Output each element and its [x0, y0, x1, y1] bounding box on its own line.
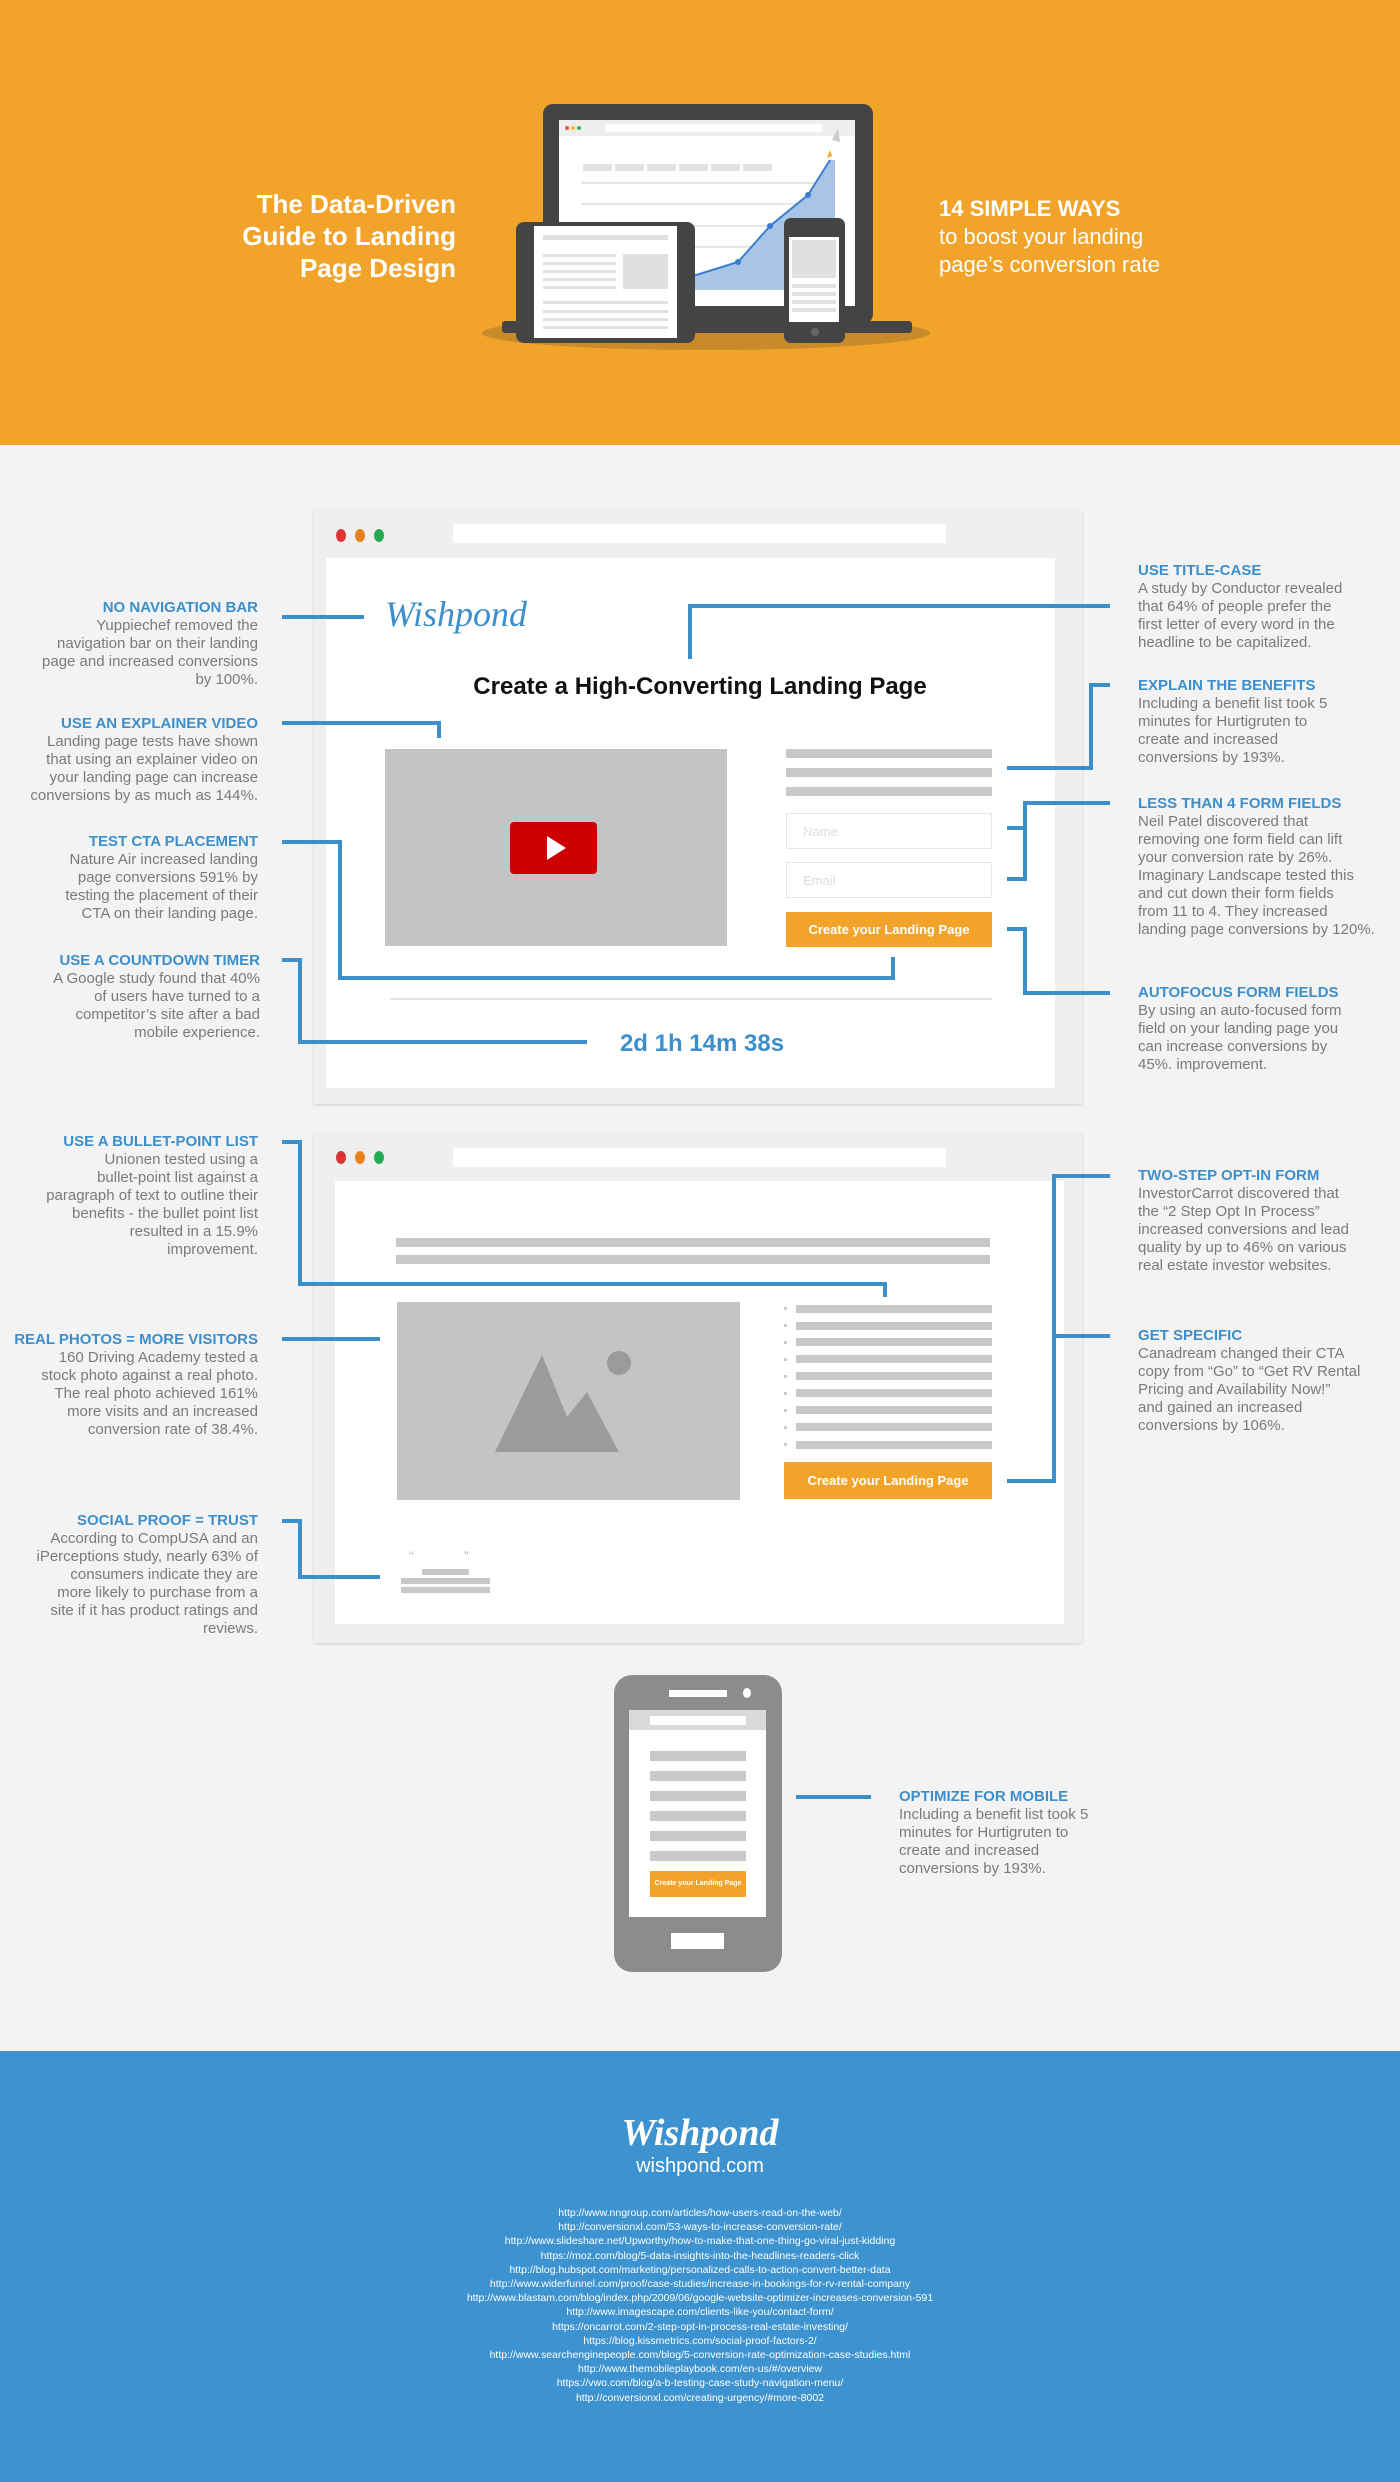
annotation: title-case: that 64% of people prefer the [1138, 598, 1331, 615]
annotation: get specific: and gained an increased [1138, 1399, 1302, 1416]
annotation: form fields [1138, 795, 1375, 938]
annotation: form fields: and cut down their form fields [1138, 885, 1334, 902]
header band [0, 0, 1400, 445]
sources list: https://oncarrot.com/2-step-opt-in-process-real-estate-investing/ [552, 2321, 848, 2333]
countdown timer: 2d 1h 14m 38s [620, 1030, 784, 1057]
annotation: explain benefits: Including a benefit list took 5 [1138, 695, 1327, 712]
annotation: two-step opt-in: TWO-STEP OPT-IN FORM [1138, 1167, 1319, 1184]
annotation: optimize for mobile: minutes for Hurtigruten to [899, 1824, 1068, 1841]
annotation: social proof: consumers indicate they are [70, 1566, 258, 1583]
annotation: no navigation bar: page and increased conversions [42, 653, 258, 670]
testimonial placeholder: “ [409, 1548, 414, 1564]
annotation: title-case: headline to be capitalized. [1138, 634, 1311, 651]
sources list: http://www.widerfunnel.com/proof/case-studies/increase-in-bookings-for-rv-rental-company [490, 2278, 910, 2290]
annotation: two-step opt-in: increased conversions and lead [1138, 1221, 1349, 1238]
annotation: explainer video [30, 715, 258, 804]
testimonial placeholder [401, 1548, 490, 1593]
annotation: explainer video: Landing page tests have shown [47, 733, 258, 750]
icon: mobile phone mockup [614, 1675, 782, 1972]
annotation: get specific: GET SPECIFIC [1138, 1327, 1242, 1344]
annotation: countdown timer: A Google study found that 40% [53, 970, 260, 987]
annotation: no navigation bar: Yuppiechef removed the [96, 617, 258, 634]
annotation: bullet-point list: improvement. [167, 1241, 258, 1258]
sources list: http://blog.hubspot.com/marketing/personalized-calls-to-action-convert-better-data [509, 2264, 891, 2276]
annotation: two-step opt-in: real estate investor websites. [1138, 1257, 1331, 1274]
form: Name [803, 824, 838, 839]
annotation: real photos: The real photo achieved 161% [55, 1385, 258, 1402]
annotation: social proof: SOCIAL PROOF = TRUST [77, 1512, 258, 1529]
bullet list [784, 1305, 992, 1449]
annotation: autofocus: can increase conversions by [1138, 1038, 1327, 1055]
annotation: two-step opt-in: InvestorCarrot discovered that [1138, 1185, 1339, 1202]
sources list: http://www.slideshare.net/Upworthy/how-to-make-that-one-thing-go-viral-just-kidding [505, 2235, 895, 2247]
sources list: http://conversionxl.com/53-ways-to-increase-conversion-rate/ [558, 2221, 842, 2233]
annotation: autofocus: By using an auto-focused form [1138, 1002, 1341, 1019]
annotation: real photos [14, 1331, 258, 1438]
footer [0, 2051, 1400, 2482]
annotation: countdown timer: mobile experience. [134, 1024, 260, 1041]
annotation: explain benefits: minutes for Hurtigruten to [1138, 713, 1307, 730]
annotation: no navigation bar: navigation bar on their landing [57, 635, 258, 652]
annotation: bullet-point list: resulted in a 15.9% [130, 1223, 258, 1240]
annotation: explain benefits: EXPLAIN THE BENEFITS [1138, 677, 1316, 694]
form [786, 749, 992, 947]
annotation: form fields: from 11 to 4. They increased [1138, 903, 1328, 920]
annotation: countdown timer [53, 952, 260, 1041]
annotation: bullet-point list: Unionen tested using a [105, 1151, 258, 1168]
annotation: test CTA placement: testing the placement of their [65, 887, 258, 904]
annotation: get specific: conversions by 106%. [1138, 1417, 1285, 1434]
annotation: real photos: conversion rate of 38.4%. [88, 1421, 258, 1438]
CTA button: Create your Landing Page [807, 1473, 969, 1488]
annotation: autofocus: AUTOFOCUS FORM FIELDS [1138, 984, 1339, 1001]
annotation: optimize for mobile: create and increased [899, 1842, 1039, 1859]
annotation: bullet-point list: paragraph of text to outline their [46, 1187, 258, 1204]
subtitle: page’s conversion rate [939, 252, 1160, 277]
sources list: http://www.blastam.com/blog/index.php/2009/06/google-website-optimizer-increases-conversion-591 [467, 2292, 933, 2304]
annotation: bullet-point list: USE A BULLET-POINT LIST [63, 1133, 258, 1150]
icon: play button [510, 822, 597, 874]
annotation: test CTA placement: CTA on their landing page. [81, 905, 258, 922]
title: The Data-Driven [257, 189, 456, 219]
annotation: title-case: A study by Conductor revealed [1138, 580, 1342, 597]
sources list: http://www.themobileplaybook.com/en-us/#/overview [578, 2363, 822, 2375]
footer logo: Wishpond [622, 2112, 778, 2154]
annotation: two-step opt-in [1138, 1167, 1349, 1274]
annotation: countdown timer: competitor’s site after a bad [75, 1006, 260, 1023]
annotation: social proof [36, 1512, 258, 1637]
sources list [467, 2207, 933, 2404]
subtitle: to boost your landing [939, 224, 1143, 249]
sources list: http://www.imagescape.com/clients-like-you/contact-form/ [566, 2306, 834, 2318]
annotation: social proof: reviews. [203, 1620, 258, 1637]
subtitle: 14 SIMPLE WAYS [939, 196, 1120, 221]
annotation: form fields: removing one form field can lift [1138, 831, 1342, 848]
illustration: devices [482, 104, 930, 350]
annotation: autofocus: 45%. improvement. [1138, 1056, 1267, 1073]
annotation: title-case: USE TITLE-CASE [1138, 562, 1261, 579]
title: Page Design [300, 253, 456, 283]
annotation: title-case: first letter of every word in the [1138, 616, 1335, 633]
annotation: two-step opt-in: the “2 Step Opt In Process” [1138, 1203, 1320, 1220]
panel: browser mockup 2 [314, 1133, 1082, 1643]
testimonial placeholder: ” [464, 1548, 469, 1564]
annotation: get specific: copy from “Go” to “Get RV Rental [1138, 1363, 1360, 1380]
subtitle [939, 196, 1160, 277]
sources list: http://www.searchenginepeople.com/blog/5-conversion-rate-optimization-case-studies.html [490, 2349, 910, 2361]
annotation: form fields: Imaginary Landscape tested this [1138, 867, 1354, 884]
annotation: form fields: landing page conversions by 120%. [1138, 921, 1375, 938]
annotation: optimize for mobile: OPTIMIZE FOR MOBILE [899, 1788, 1068, 1805]
annotation: two-step opt-in: quality by up to 46% on various [1138, 1239, 1346, 1256]
title [242, 189, 456, 283]
video placeholder [385, 749, 727, 946]
annotation: no navigation bar [42, 599, 258, 688]
annotation: real photos: stock photo against a real photo. [41, 1367, 258, 1384]
annotation: form fields: LESS THAN 4 FORM FIELDS [1138, 795, 1341, 812]
logo: wishpond: Wishpond [385, 594, 527, 634]
annotation: explainer video: that using an explainer video on [46, 751, 258, 768]
sources list: https://vwo.com/blog/a-b-testing-case-study-navigation-menu/ [557, 2377, 843, 2389]
footer website: wishpond.com [636, 2155, 764, 2177]
annotation: bullet-point list: benefits - the bullet point list [72, 1205, 258, 1222]
annotation: bullet-point list: bullet-point list against a [97, 1169, 258, 1186]
CTA button [784, 1462, 992, 1499]
annotation: test CTA placement: TEST CTA PLACEMENT [89, 833, 258, 850]
annotation: countdown timer: USE A COUNTDOWN TIMER [59, 952, 260, 969]
annotation: real photos: REAL PHOTOS = MORE VISITORS [14, 1331, 258, 1348]
annotation: autofocus [1138, 984, 1341, 1073]
annotation: optimize for mobile [899, 1788, 1088, 1877]
annotation: test CTA placement: page conversions 591% by [78, 869, 258, 886]
headline: Create a High-Converting Landing Page [473, 673, 927, 700]
annotation: test CTA placement: Nature Air increased landing [70, 851, 258, 868]
annotation: countdown timer: of users have turned to a [94, 988, 260, 1005]
annotation: explain benefits [1138, 677, 1327, 766]
annotation: real photos: more visits and an increased [67, 1403, 258, 1420]
annotation: social proof: more likely to purchase from a [57, 1584, 258, 1601]
annotation: explainer video: your landing page can increase [50, 769, 258, 786]
image placeholder [397, 1302, 740, 1500]
annotation: get specific: Pricing and Availability Now!” [1138, 1381, 1330, 1398]
annotation: real photos: 160 Driving Academy tested a [59, 1349, 258, 1366]
annotation: autofocus: field on your landing page you [1138, 1020, 1338, 1037]
form: Create your Landing Page [808, 922, 970, 937]
panel: browser mockup 1 [314, 510, 1082, 1104]
annotation: get specific [1138, 1327, 1360, 1434]
annotation: bullet-point list [46, 1133, 258, 1258]
annotation: explainer video: conversions by as much as 144%. [30, 787, 258, 804]
annotation: test CTA placement [65, 833, 258, 922]
annotation: social proof: According to CompUSA and an [50, 1530, 258, 1547]
form: Email [803, 873, 836, 888]
icon: mobile phone mockup: Create your Landing Page [655, 1880, 741, 1887]
sources list: https://moz.com/blog/5-data-insights-into-the-headlines-readers-click [541, 2250, 859, 2262]
annotation: social proof: iPerceptions study, nearly 63% of [36, 1548, 258, 1565]
annotation: explain benefits: create and increased [1138, 731, 1278, 748]
annotation: get specific: Canadream changed their CTA [1138, 1345, 1344, 1362]
annotation: title-case [1138, 562, 1342, 651]
sources list: https://blog.kissmetrics.com/social-proof-factors-2/ [583, 2335, 817, 2347]
sources list: http://www.nngroup.com/articles/how-users-read-on-the-web/ [558, 2207, 842, 2219]
annotation: optimize for mobile: conversions by 193%. [899, 1860, 1046, 1877]
text bars [396, 1238, 990, 1264]
title: Guide to Landing [242, 221, 456, 251]
annotation: no navigation bar: NO NAVIGATION BAR [103, 599, 258, 616]
sources list: http://conversionxl.com/creating-urgency/#more-8002 [576, 2392, 824, 2404]
annotation: form fields: Neil Patel discovered that [1138, 813, 1308, 830]
annotation: social proof: site if it has product ratings and [50, 1602, 258, 1619]
annotation: explain benefits: conversions by 193%. [1138, 749, 1285, 766]
annotation: optimize for mobile: Including a benefit list took 5 [899, 1806, 1088, 1823]
annotation: no navigation bar: by 100%. [195, 671, 258, 688]
annotation: form fields: your conversion rate by 26%. [1138, 849, 1332, 866]
annotation: explainer video: USE AN EXPLAINER VIDEO [61, 715, 258, 732]
